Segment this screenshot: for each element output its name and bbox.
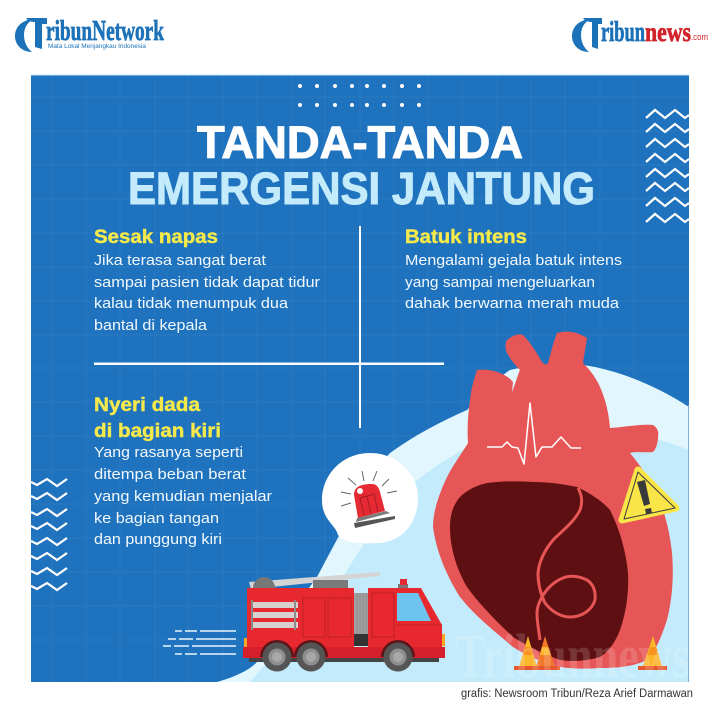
icon: siren bubble [322, 453, 418, 543]
background blob: inner light arc [250, 429, 689, 682]
text block: Sesak napas [94, 227, 320, 334]
dividers [94, 226, 444, 428]
text block: Nyeri dada: ke bagian tangan [94, 511, 219, 527]
logo: Tribunnews.com: ribun [601, 17, 645, 48]
credit: grafis: Newsroom Tribun/Reza Arief Darmawan [461, 688, 693, 700]
illustration: speed lines [163, 631, 236, 654]
heart chamber [450, 481, 628, 661]
ECG line [487, 403, 581, 464]
illustration: cones [514, 636, 667, 670]
logo: Tribun Network: ribunNetwork [46, 16, 164, 47]
title: TANDA-TANDA [197, 117, 523, 168]
heart vessel line [537, 488, 595, 640]
text block: Nyeri dada [94, 395, 272, 548]
text block: Batuk intens: Batuk intens [405, 227, 527, 248]
text block: Sesak napas: kalau tidak menumpuk dua [94, 296, 289, 312]
text block: Nyeri dada: yang kemudian menjalar [94, 489, 272, 505]
logo: Tribunnews.com [572, 17, 708, 52]
text block: Sesak napas: bantal di kepala [94, 318, 208, 334]
decoration: dots [298, 84, 421, 107]
text block: Sesak napas: Jika terasa sangat berat [94, 253, 266, 269]
panel: blue background [31, 75, 689, 682]
title [128, 117, 595, 214]
text block: Batuk intens: dahak berwarna merah muda [405, 296, 620, 312]
text block: Nyeri dada: ditempa beban berat [94, 467, 246, 483]
logo: Tribunnews.com: news [645, 17, 691, 47]
background blob: outer light arc [217, 364, 689, 682]
illustration: heart [433, 332, 673, 669]
text block: Batuk intens: Mengalami gejala batuk intens [405, 253, 622, 269]
text block: Sesak napas: Sesak napas [94, 227, 218, 248]
icon: warning triangle [622, 470, 676, 520]
text block: Nyeri dada: Nyeri dada [94, 395, 200, 416]
text block: Nyeri dada: Yang rasanya seperti [94, 445, 243, 461]
decoration: left zigzags [31, 479, 67, 590]
logo: Tribun Network [15, 16, 164, 52]
text block: Nyeri dada: dan punggung kiri [94, 532, 222, 548]
text block: Batuk intens [405, 227, 622, 312]
logo: Tribun Network: Mata Lokal Menjangkau Indonesia [48, 43, 146, 50]
text block: Sesak napas: sampai pasien tidak dapat tidur [94, 275, 320, 291]
illustration: fire truck [243, 572, 445, 672]
text block: Nyeri dada: di bagian kiri [94, 421, 221, 442]
panel edge [688, 405, 690, 682]
decoration: right zigzags [646, 110, 689, 222]
text block: Batuk intens: yang sampai mengeluarkan [405, 275, 595, 291]
logo: Tribunnews.com: .com [691, 32, 708, 42]
title: EMERGENSI JANTUNG [128, 163, 595, 214]
